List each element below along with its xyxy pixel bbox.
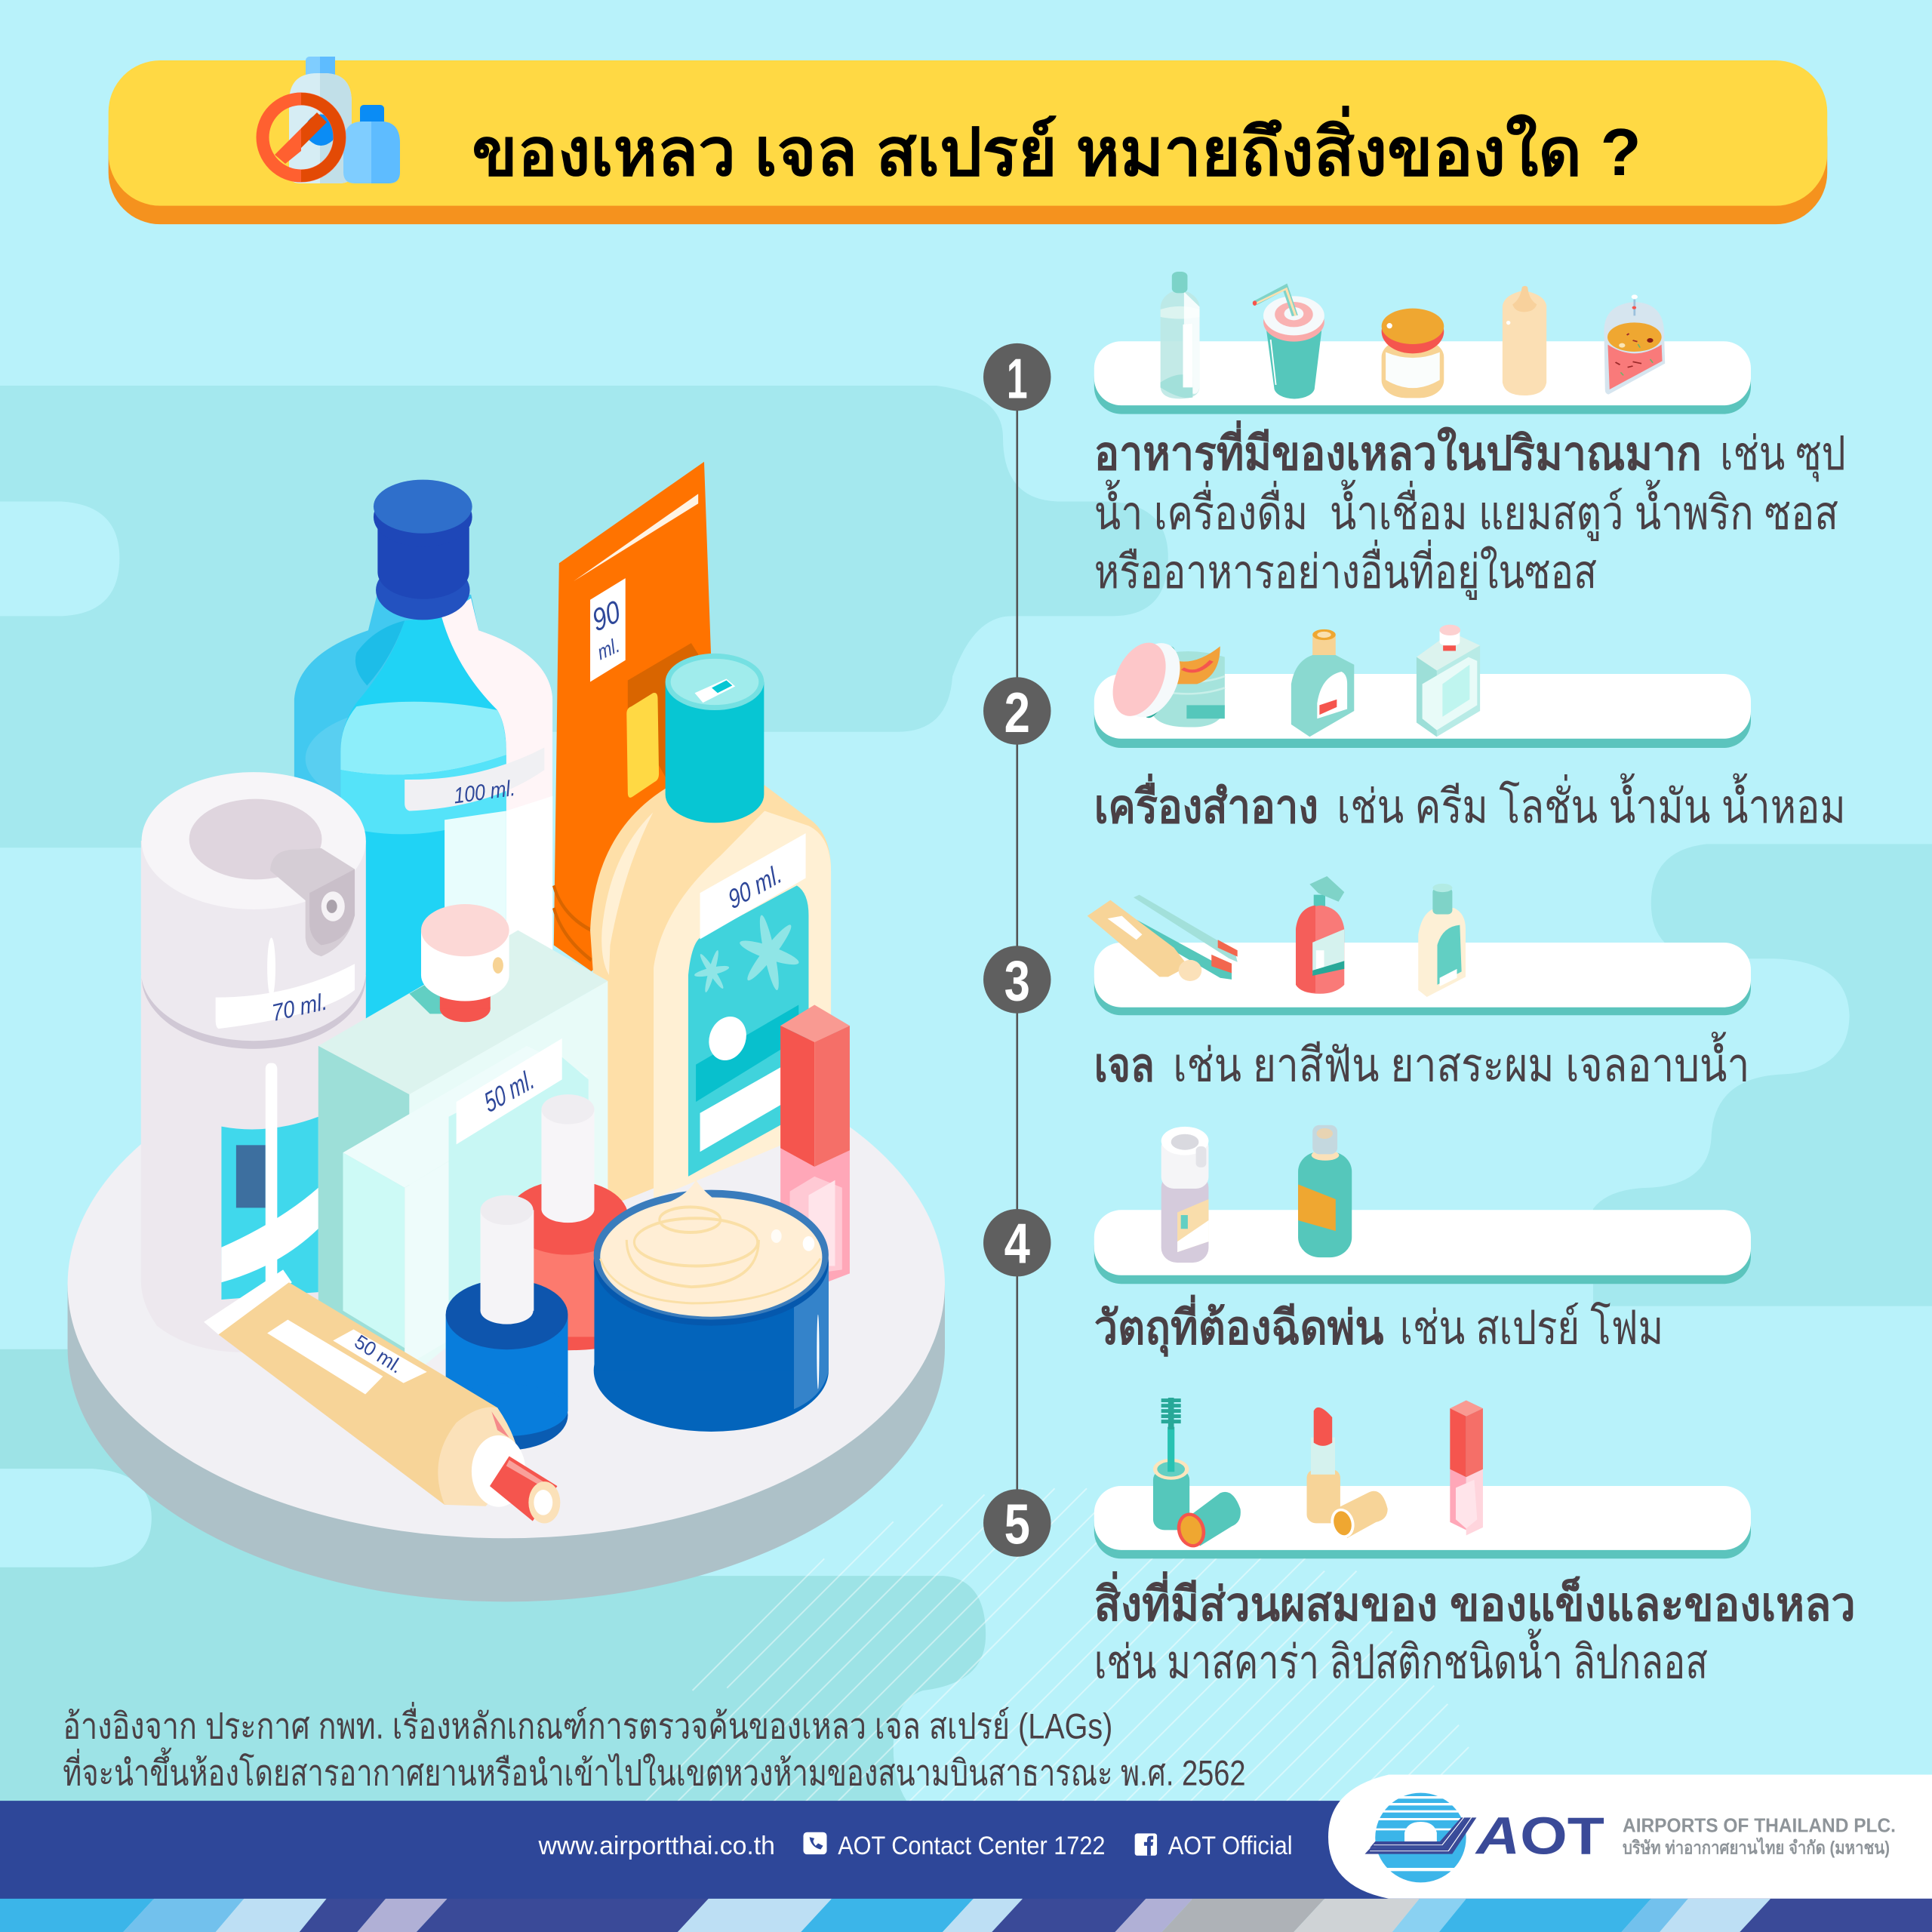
item 4 text: วัตถุที่ต้องฉีดพ่น	[1094, 1294, 1383, 1356]
footer	[0, 1801, 1932, 1932]
icon: spray can	[1161, 1127, 1208, 1263]
contact: phone: AOT Contact Center 1722	[838, 1832, 1105, 1860]
lip gloss	[780, 1005, 850, 1284]
logo mark	[1364, 1793, 1476, 1882]
item 5 text: สิ่งที่มีส่วนผสมของ ของแข็งและของเหลว	[1094, 1571, 1856, 1631]
icon: toothpaste and brushes	[1088, 895, 1238, 981]
panel: logo	[1328, 1775, 1932, 1899]
item 3 text: เช่น ยาสีฟัน ยาสระผม เจลอาบน้ำ	[1173, 1032, 1749, 1092]
bottle 100 ml: 100 ml.	[453, 775, 516, 808]
item 2 text: เครื่องสำอาง	[1094, 774, 1318, 833]
icons: food liquids	[1161, 272, 1665, 398]
toothpaste tube 50 ml: 50 ml.	[352, 1329, 405, 1379]
icon: sauce bottle	[1503, 286, 1546, 395]
item 1 text: หรืออาหารอย่างอื่นที่อยู่ในซอส	[1094, 540, 1597, 600]
item 1 text	[1094, 420, 1846, 600]
item 4 text: เช่น สเปรย์ โฟม	[1400, 1301, 1663, 1354]
icon: gloss	[1450, 1401, 1483, 1535]
icon: foam bottle	[1298, 1125, 1352, 1257]
number 1: 1	[1007, 346, 1028, 410]
footnote	[63, 1702, 1246, 1794]
title: ของเหลว เจล สเปรย์ หมายถึงสิ่งของใด ?	[472, 105, 1641, 189]
contact: website: www.airportthai.co.th	[537, 1832, 775, 1860]
perfume box 50 ml: 50 ml.	[481, 1063, 538, 1119]
icon: prohibited bottles	[263, 57, 400, 183]
number 2: 2	[1004, 681, 1030, 744]
orange tube: 90	[589, 593, 624, 638]
stripes	[0, 1899, 1932, 1932]
footnote: ที่จะนำขึ้นห้องโดยสารอากาศยานหรือนำเข้าไปในเขตหวงห้ามของสนามบินสาธารณะ พ.ศ. 2562	[63, 1748, 1246, 1794]
number 3	[983, 946, 1051, 1014]
number 5: 5	[1004, 1493, 1030, 1556]
bottle 70 ml	[141, 772, 366, 1352]
bottle 70 ml: 70 ml.	[270, 989, 329, 1027]
cream bottle 90 ml: 90 ml.	[724, 858, 785, 915]
icon: food bag	[1604, 294, 1665, 395]
icon: jam jar	[1382, 309, 1444, 398]
plate	[68, 1031, 945, 1601]
item 1 text: อาหารที่มีของเหลวในปริมาณมาก	[1094, 420, 1702, 480]
toothpaste tube 50 ml	[204, 1269, 560, 1524]
icon: lipstick	[1307, 1407, 1388, 1540]
icons: gels, sprays and mixed	[1088, 876, 1483, 1550]
icon: phone	[803, 1832, 827, 1854]
bottle 100 ml	[294, 480, 552, 1042]
company name: AIRPORTS OF THAILAND PLC.	[1623, 1814, 1896, 1837]
cream bottle 90 ml	[590, 654, 831, 1206]
panel: item shelves	[1094, 341, 1751, 1558]
item 5 text: เช่น มาสคาร่า ลิปสติกชนิดน้ำ ลิปกลอส	[1094, 1629, 1708, 1689]
item 2 text: เช่น ครีม โลชั่น น้ำมัน น้ำหอม	[1337, 773, 1846, 833]
timeline	[983, 343, 1051, 1557]
icon: perfume	[1417, 625, 1480, 737]
item 5 text	[1094, 1571, 1856, 1689]
orange tube	[554, 462, 712, 971]
footnote: อ้างอิงจาก ประกาศ กพท. เรื่องหลักเกณฑ์การตรวจค้นของเหลว เจล สเปรย์ (LAGs)	[63, 1702, 1112, 1747]
item 3 text	[1094, 1032, 1749, 1092]
icon: pump bottle	[1296, 876, 1344, 994]
item 3 text: เจล	[1094, 1040, 1155, 1092]
icon: bottle	[1161, 272, 1200, 398]
icon: lotion bottle	[1418, 884, 1466, 997]
number 5	[983, 1489, 1051, 1557]
icon: toner bottle	[1291, 629, 1354, 737]
blue nail polish	[446, 1195, 568, 1451]
logo text AOT: AOT	[1475, 1807, 1604, 1866]
text block: descriptions	[63, 420, 1856, 1794]
icon: mascara	[1153, 1398, 1241, 1550]
icon: cream jar open	[1104, 639, 1225, 728]
icon: cup	[1253, 288, 1324, 398]
icons: cosmetics	[1104, 625, 1480, 737]
item 2 text	[1094, 773, 1846, 833]
item 1 text: เช่น ซุป	[1720, 428, 1846, 481]
cream jar	[594, 1180, 829, 1432]
panel: title banner	[109, 60, 1827, 224]
number 1	[983, 343, 1051, 411]
number 2	[983, 677, 1051, 745]
contact: facebook: AOT Official	[1168, 1832, 1293, 1860]
item 4 text	[1094, 1294, 1663, 1356]
perfume box 50 ml	[318, 904, 608, 1378]
icon: facebook	[1135, 1833, 1157, 1856]
red nail polish	[507, 1094, 629, 1350]
illustration: cosmetics on plate	[68, 462, 945, 1601]
number 4	[983, 1209, 1051, 1276]
company name thai: บริษัท ท่าอากาศยานไทย จำกัด (มหาชน)	[1623, 1837, 1890, 1859]
orange tube: ml.	[595, 633, 622, 665]
number 3: 3	[1004, 949, 1030, 1013]
number 4: 4	[1004, 1211, 1030, 1275]
